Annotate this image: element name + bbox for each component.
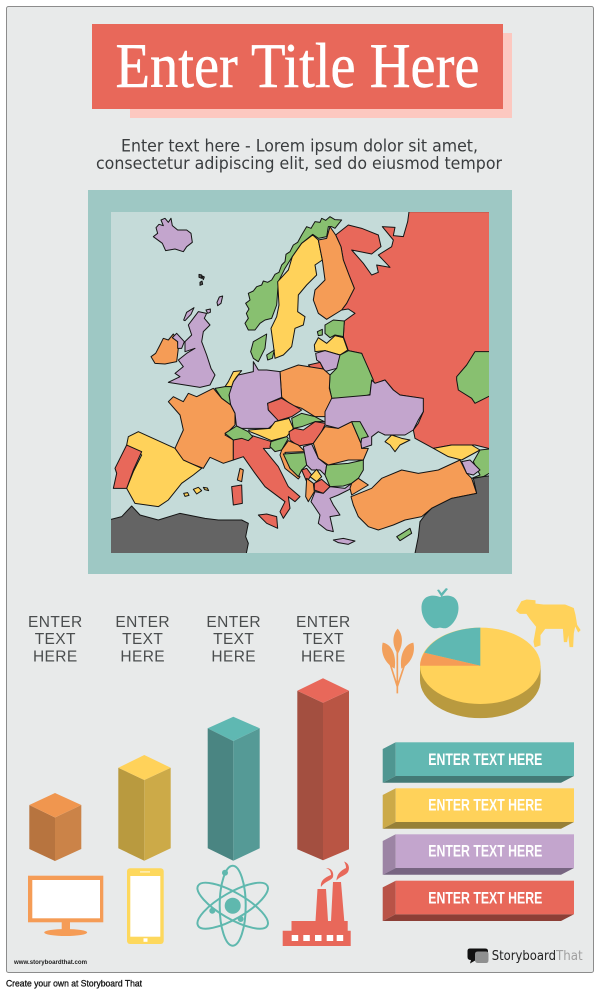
- Spain: [127, 432, 202, 507]
- Slovenia: [270, 437, 288, 452]
- Albania: [306, 478, 314, 502]
- ribbon: red: [383, 881, 574, 921]
- Germany: [229, 362, 282, 428]
- Belarus: [329, 351, 373, 398]
- title banner: Enter Title Here: [116, 30, 480, 101]
- Saaremaa: [317, 329, 322, 336]
- Sardinia: [232, 485, 242, 505]
- northern countries: [151, 212, 495, 450]
- Denmark: [251, 334, 267, 362]
- title banner: [92, 24, 512, 118]
- North Africa: [108, 506, 248, 557]
- Ukraine: [325, 380, 423, 448]
- ribbon: purple: ENTER TEXT HERE: [428, 842, 542, 861]
- Portugal: [113, 445, 142, 488]
- Sweden: [271, 235, 322, 358]
- bar labels: HERE: [301, 648, 346, 666]
- Kosovo: [310, 469, 322, 482]
- icon: monitor: [28, 876, 103, 936]
- Russia: [336, 212, 495, 450]
- bar labels: ENTER: [296, 614, 351, 631]
- Switzerland: [225, 426, 253, 441]
- Estonia: [325, 320, 344, 338]
- North Macedonia: [314, 479, 330, 493]
- bar labels: ENTER: [28, 614, 83, 631]
- Turkish Thrace: [350, 478, 368, 495]
- Ireland: [151, 334, 178, 364]
- Middle East: [414, 475, 495, 557]
- map of Europe: [108, 212, 495, 557]
- Orkney: [206, 309, 210, 313]
- bar: orange cube: [29, 793, 81, 861]
- pie chart: [420, 628, 541, 718]
- Austria: [248, 418, 293, 441]
- icon: atom: [192, 866, 274, 946]
- Hungary: [289, 422, 326, 446]
- Balearic Islands: [184, 487, 209, 496]
- Armenia: [462, 460, 480, 475]
- footer credit: Create your own at Storyboard That: [6, 978, 142, 989]
- Latvia: [314, 336, 348, 355]
- ribbon: teal: [383, 742, 574, 783]
- bar labels: [28, 614, 351, 666]
- Danish islands: [267, 350, 274, 360]
- icon: cow: [517, 600, 580, 647]
- ribbon: red: ENTER TEXT HERE: [428, 888, 542, 907]
- Corsica: [237, 468, 243, 482]
- Norway: [245, 217, 342, 330]
- Serbia: [303, 444, 327, 475]
- website url: www.storyboardthat.com: [13, 959, 87, 966]
- Crimea: [385, 435, 410, 452]
- Moldova: [352, 422, 368, 443]
- ribbon: purple: [383, 834, 574, 875]
- Belgium: [215, 387, 232, 405]
- Storyboard That logo: Storyboard: [492, 949, 556, 964]
- Shetland: [217, 296, 223, 306]
- Sicily: [258, 514, 278, 528]
- bar: red: [297, 678, 349, 860]
- Turkey: [351, 460, 477, 530]
- bar labels: HERE: [33, 648, 78, 666]
- Slovakia: [292, 413, 324, 428]
- bar labels: TEXT: [122, 631, 163, 648]
- Faroe Islands: [199, 274, 204, 285]
- intro text: [96, 136, 502, 174]
- Cyprus: [397, 528, 412, 541]
- Storyboard That logo: [468, 948, 583, 964]
- icon: smartphone: [127, 868, 164, 944]
- Kazakhstan: [456, 351, 489, 404]
- Lithuania: [316, 351, 342, 372]
- Bosnia: [283, 453, 307, 477]
- Northern Ireland: [172, 333, 184, 348]
- southern countries: [108, 352, 495, 557]
- Netherlands: [225, 371, 242, 387]
- Kaliningrad: [308, 362, 323, 369]
- bar labels: ENTER: [115, 614, 170, 631]
- Montenegro: [302, 468, 312, 482]
- bar labels: HERE: [120, 648, 165, 666]
- Finland: [313, 227, 354, 319]
- France: [168, 388, 235, 468]
- Great Britain: [168, 312, 215, 387]
- bar labels: TEXT: [303, 631, 344, 648]
- icon: wheat: [382, 629, 414, 693]
- Azerbaijan: [472, 448, 495, 478]
- Poland: [280, 365, 332, 417]
- ribbon: teal: ENTER TEXT HERE: [428, 750, 542, 769]
- bar: teal: [208, 717, 260, 861]
- icon: factory: [283, 862, 351, 946]
- intro text: Enter text here - Lorem ipsum dolor sit amet,: [121, 136, 478, 156]
- Iceland: [153, 218, 192, 252]
- Greece: [311, 483, 352, 532]
- ribbon: yellow: [383, 788, 574, 829]
- Bulgaria: [325, 460, 363, 487]
- Outer Hebrides: [184, 308, 194, 321]
- Italy: [233, 435, 300, 518]
- bar labels: ENTER: [206, 614, 261, 631]
- icon: apple: [422, 588, 458, 628]
- Storyboard That logo: That: [555, 949, 583, 964]
- Crete: [333, 538, 355, 544]
- Croatia: [280, 441, 305, 479]
- ribbon: yellow: ENTER TEXT HERE: [428, 796, 542, 815]
- bar: yellow: [118, 755, 171, 861]
- map frame: [88, 190, 512, 574]
- Georgia: [433, 445, 480, 460]
- Romania: [313, 422, 368, 465]
- bar labels: TEXT: [213, 631, 254, 648]
- Czechia: [268, 398, 302, 421]
- bar labels: HERE: [211, 648, 256, 666]
- bar labels: TEXT: [35, 631, 76, 648]
- intro text: consectetur adipiscing elit, sed do eiusmod tempor: [96, 154, 502, 174]
